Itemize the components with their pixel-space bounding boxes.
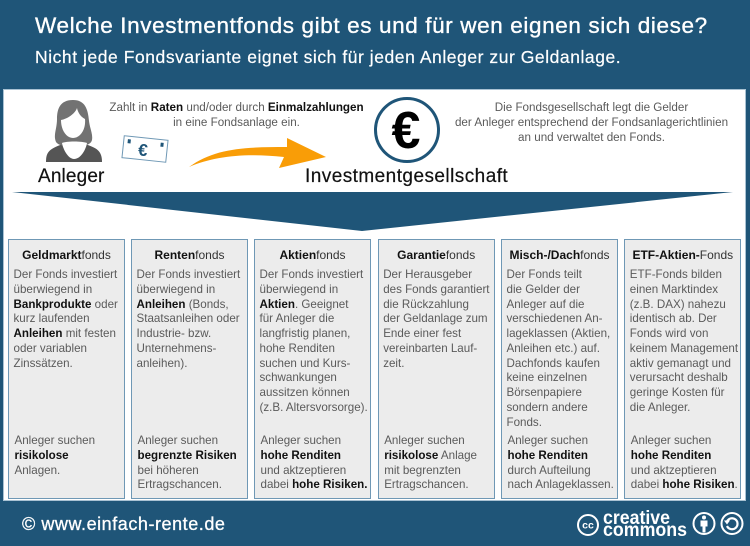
- description: einen Marktindex: [630, 283, 718, 296]
- description: Börsenpapiere: [506, 386, 582, 399]
- description: langfristig planen,: [260, 327, 350, 340]
- description: Dachfonds kaufen: [506, 356, 600, 370]
- description: die Gelder der: [506, 283, 580, 296]
- description: der Geldanlage zum: [383, 312, 488, 325]
- investor profile: [14, 434, 95, 477]
- icon: banknote: [121, 135, 169, 163]
- description: des Fonds garantiert: [383, 283, 490, 296]
- description: schwankungen: [260, 371, 337, 384]
- heading: Geldmarktfonds: [22, 248, 111, 262]
- description: Der Fonds teilt: [506, 268, 582, 281]
- description: Bankprodukte oder: [14, 298, 118, 310]
- investor profile: [630, 434, 738, 491]
- arrow: payment flow: [189, 138, 326, 168]
- investor profile: hohe Renditen: [260, 449, 341, 462]
- description: aktiv gemanagt und: [630, 356, 731, 370]
- investor profile: durch Aufteilung: [508, 464, 591, 477]
- payment text: Zahlt in Raten und/oder durch Einmalzahlungen: [109, 101, 364, 114]
- heading: Misch-/Dachfonds: [509, 248, 610, 262]
- icon: investor woman: [46, 100, 102, 162]
- investor profile: Ertragschancen.: [384, 478, 469, 491]
- title: Welche Investmentfonds gibt es und für wen eignen sich diese?: [35, 13, 708, 38]
- icon: euro circle: [374, 97, 440, 163]
- investor profile: nach Anlageklassen.: [508, 478, 614, 491]
- investor profile: und aktzeptieren: [260, 464, 346, 477]
- investor profile: begrenzte Risiken: [138, 449, 237, 462]
- investor profile: [138, 434, 237, 491]
- investor profile: dabei hohe Risiken.: [260, 478, 367, 491]
- icon: creative commons licence: creative: [603, 508, 670, 529]
- investor profile: Anleger suchen: [631, 434, 711, 447]
- subtitle: Nicht jede Fondsvariante eignet sich für jeden Anleger zur Geldanlage.: [35, 47, 621, 67]
- description: Der Fonds investiert: [260, 268, 363, 281]
- footer: website: © www.einfach-rente.de: [22, 514, 225, 534]
- description: Fonds.: [506, 416, 542, 428]
- description: identisch ab. Der: [630, 312, 717, 325]
- description: keine einzelnen: [506, 371, 587, 384]
- investor profile: Anleger suchen: [138, 434, 218, 447]
- investor profile: dabei hohe Risiken.: [631, 478, 738, 491]
- investor profile: Anleger suchen: [508, 434, 588, 447]
- description: [14, 268, 118, 370]
- description: Aktien. Geeignet: [260, 298, 348, 310]
- description: (z.B. DAX) nahezu: [630, 298, 726, 310]
- investor profile: Anleger suchen: [14, 434, 95, 447]
- icon: creative commons licence: cc: [582, 520, 594, 532]
- investor profile: risikolose Anlage: [384, 449, 477, 462]
- investor profile: [260, 434, 367, 491]
- description: Industrie- bzw.: [136, 327, 211, 340]
- description: verschiedenen An-: [506, 312, 603, 325]
- company text: [455, 101, 728, 144]
- heading: Garantiefonds: [397, 248, 475, 262]
- investor profile: hohe Renditen: [508, 449, 588, 462]
- description: Ende einer fest: [383, 327, 461, 340]
- description: geringe Kosten für: [630, 386, 725, 399]
- description: Anleihen (Bonds,: [136, 298, 229, 310]
- description: (z.B. Altersvorsorge).: [260, 401, 368, 414]
- investor profile: Ertragschancen.: [138, 478, 222, 491]
- description: Fonds wird von: [630, 327, 708, 340]
- investor profile: mit begrenzten: [384, 464, 461, 477]
- description: sondern andere: [506, 401, 588, 414]
- description: [506, 268, 610, 428]
- investor profile: [384, 434, 477, 491]
- description: oder variablen: [14, 342, 87, 355]
- heading: Aktienfonds: [279, 248, 346, 262]
- description: anleihen).: [136, 356, 187, 370]
- description: aussitzen können: [260, 386, 350, 399]
- company text: Die Fondsgesellschaft legt die Gelder: [495, 101, 688, 114]
- investor profile: Anlagen.: [14, 464, 60, 477]
- heading: Rentenfonds: [154, 248, 225, 262]
- description: überwiegend in: [136, 283, 215, 296]
- description: keinem Management: [630, 342, 738, 355]
- investor profile: [508, 434, 614, 491]
- description: überwiegend in: [14, 283, 92, 296]
- panel: Garantiefonds: [378, 239, 495, 499]
- icon: banknote: €: [137, 140, 149, 160]
- description: Der Fonds investiert: [136, 268, 240, 281]
- company text: der Anleger entsprechend der Fondsanlagerichtlinien: [455, 116, 728, 129]
- investor profile: risikolose: [14, 449, 69, 462]
- description: die Anleger.: [630, 401, 690, 414]
- panel: ETF-Aktien-Fonds: [624, 239, 741, 499]
- investor profile: Anleger suchen: [384, 434, 465, 447]
- funnel: [12, 192, 733, 231]
- icon: creative commons licence: commons: [603, 520, 687, 541]
- panel: Rentenfonds: [131, 239, 248, 499]
- description: Der Herausgeber: [383, 268, 472, 281]
- company text: an und verwaltet den Fonds.: [518, 131, 665, 144]
- description: Anleger auf die: [506, 298, 584, 310]
- description: suchen und Kurs-: [260, 356, 350, 370]
- investor profile: hohe Renditen: [631, 449, 711, 462]
- description: Anleihen mit festen: [14, 327, 116, 340]
- description: überwiegend in: [260, 283, 338, 296]
- icon: creative commons licence: [577, 508, 744, 541]
- panel: Misch-/Dachfonds: [501, 239, 618, 499]
- description: zeit.: [383, 356, 404, 370]
- investment company label: Investmentgesellschaft: [305, 166, 508, 187]
- description: verursacht deshalb: [630, 371, 728, 384]
- heading: ETF-Aktien-Fonds: [632, 248, 733, 262]
- panel: white content area: [3, 89, 746, 501]
- panel: Geldmarktfonds: [8, 239, 125, 499]
- description: lageklassen (Aktien,: [506, 327, 610, 340]
- description: vereinbarten Lauf-: [383, 342, 477, 355]
- panel: Aktienfonds: [254, 239, 371, 499]
- payment text: in eine Fondsanlage ein.: [173, 116, 300, 129]
- description: Der Fonds investiert: [14, 268, 117, 281]
- investor profile: bei höheren: [138, 464, 199, 477]
- investor label: Anleger: [38, 166, 105, 187]
- description: [383, 268, 490, 370]
- description: [630, 268, 738, 414]
- investor profile: und aktzeptieren: [631, 464, 717, 477]
- description: [136, 268, 240, 370]
- description: Staatsanleihen oder: [136, 312, 240, 325]
- description: ETF-Fonds bilden: [630, 268, 722, 281]
- description: Zinssätzen.: [14, 356, 73, 370]
- description: kurz laufenden: [14, 312, 90, 325]
- description: hohe Renditen: [260, 342, 335, 355]
- payment text: [109, 101, 364, 129]
- investor profile: Anleger suchen: [260, 434, 341, 447]
- description: für Anleger die: [260, 312, 334, 325]
- description: [260, 268, 368, 414]
- description: Anleihen etc.) auf.: [506, 342, 600, 355]
- description: die Rückzahlung: [383, 298, 469, 310]
- description: Unternehmens-: [136, 342, 216, 355]
- icon: euro circle: €: [392, 102, 420, 160]
